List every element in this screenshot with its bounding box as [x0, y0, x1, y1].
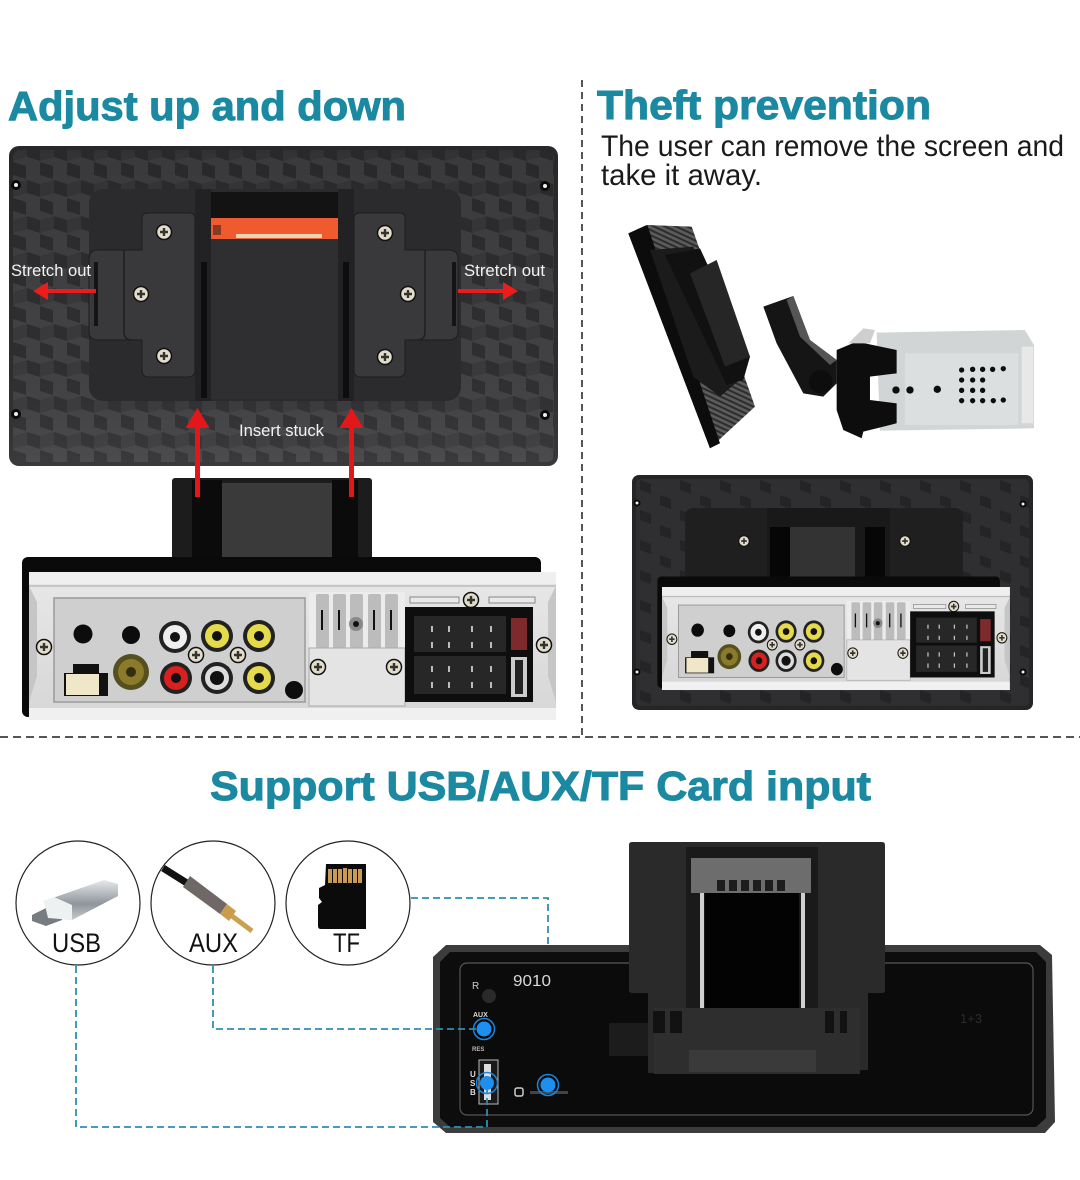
tab: [172, 478, 372, 560]
USB label: S: [470, 1079, 476, 1088]
left slide bracket: [89, 213, 195, 377]
faint icons: 1+3: [960, 1011, 982, 1026]
image: screen side view: [628, 225, 755, 448]
model number: 9010: [513, 973, 551, 990]
arrow: stretch right: [458, 282, 518, 300]
image: radio side view with arm: [763, 296, 1034, 438]
IR sensor: R: [472, 981, 479, 992]
circle: USB: [16, 841, 140, 965]
title: Theft prevention: Theft prevention: [597, 82, 931, 128]
arrow: stretch left: [33, 282, 96, 300]
label: TF: TF: [333, 928, 360, 958]
title: Support USB/AUX/TF Card input: Support USB/AUX/TF Card input: [210, 763, 871, 809]
AUX label: AUX: [473, 1012, 488, 1019]
reset label: RES: [472, 1047, 484, 1053]
label: insert stuck: Insert stuck: [239, 422, 325, 440]
connector: TF dashed line: [411, 898, 548, 1080]
radio front unit: [433, 945, 1055, 1133]
device: radio rear with tab: [22, 478, 556, 720]
marker: AUX port: [474, 1018, 494, 1040]
orange connector strip: [211, 218, 338, 239]
text: theft prevention description: take it away.: [601, 159, 762, 192]
circle: AUX: [151, 841, 275, 965]
connector: USB dashed line: [76, 966, 487, 1127]
text: theft prevention description: The user can remove the screen and: [601, 130, 1064, 163]
arrow: insert left: [186, 408, 210, 497]
USB label: [470, 1070, 476, 1097]
mounting plate: [89, 189, 461, 401]
label: stretch out right: Stretch out: [464, 262, 545, 280]
text: theft prevention description: [601, 130, 1064, 192]
divider: vertical dashed: [581, 80, 583, 738]
label: AUX: AUX: [189, 928, 238, 958]
flap: upper mount: [609, 842, 885, 1074]
marker: TF port: [538, 1074, 558, 1096]
USB port: [479, 1060, 498, 1104]
label: stretch out left: Stretch out: [11, 262, 91, 280]
icon: audio jack: [163, 868, 252, 931]
icon: microSD card: [318, 864, 366, 929]
marker: USB port: [476, 1072, 498, 1094]
image: assembled rear view: [632, 475, 1033, 710]
title: Adjust up and down: Adjust up and down: [8, 83, 406, 129]
IR sensor: [472, 981, 496, 1003]
TF slot: [515, 1088, 568, 1096]
icon: USB stick: [32, 880, 118, 926]
arrow: insert right: [340, 408, 364, 497]
right slide bracket: [354, 213, 458, 377]
USB label: B: [470, 1088, 476, 1097]
circle: TF: [286, 841, 410, 965]
panel: screen back with mounting plate: [9, 146, 558, 466]
mounting holes: [12, 182, 548, 418]
USB label: U: [470, 1070, 476, 1079]
divider: horizontal dashed: [0, 736, 1080, 738]
connector: AUX dashed line: [213, 966, 478, 1029]
label: USB: USB: [52, 928, 101, 958]
